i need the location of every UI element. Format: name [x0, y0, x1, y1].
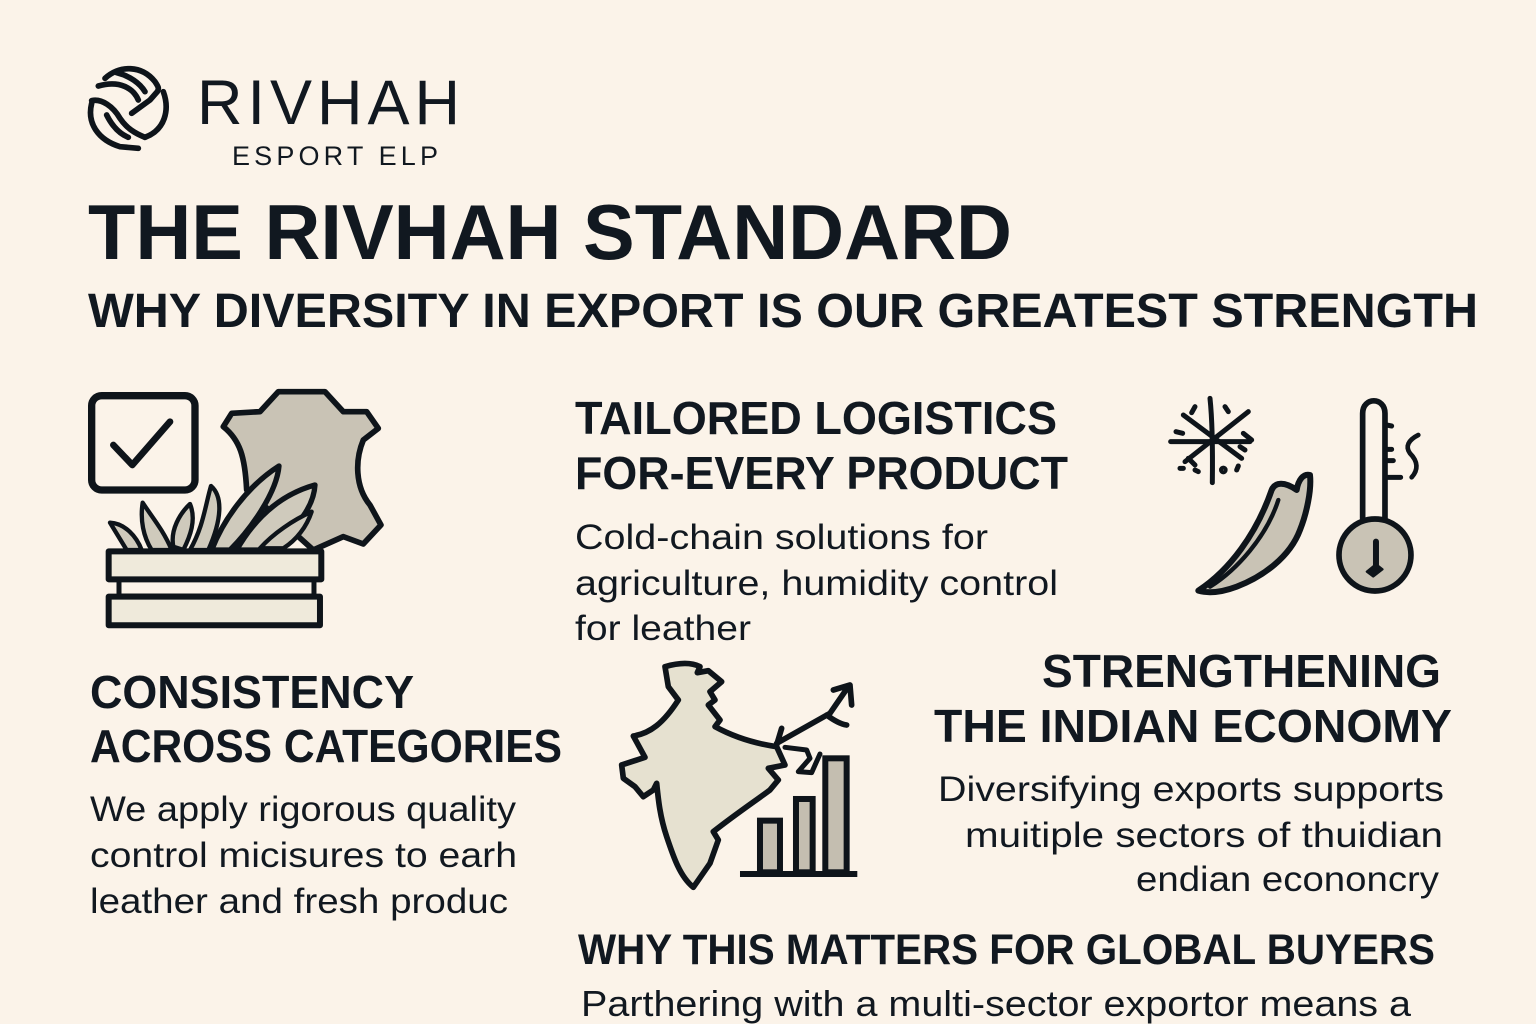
body text: agriculture, humidity control — [575, 564, 1058, 603]
icon: growth arrow — [777, 685, 852, 745]
body text: Cold-chain solutions for — [575, 518, 988, 557]
body text: for leather — [575, 609, 751, 648]
body text — [938, 770, 1444, 899]
icon: snowflake, chili and thermometer — [1171, 398, 1418, 592]
body text — [575, 518, 1058, 648]
body text: muitiple sectors of thuidian — [965, 816, 1443, 855]
body text: Parthering with a multi-sector exportor means a — [581, 983, 1412, 1024]
logo tagline: ESPORT ELP — [232, 141, 438, 171]
panel: strengthening the Indian economy — [934, 645, 1452, 899]
heading: TAILORED LOGISTICS — [575, 392, 1057, 444]
heading: THE INDIAN ECONOMY — [934, 700, 1452, 752]
heading: ACROSS CATEGORIES — [90, 720, 562, 772]
body text: Diversifying exports supports — [938, 770, 1444, 809]
heading — [575, 392, 1068, 499]
heading: FOR-EVERY PRODUCT — [575, 447, 1068, 499]
title: THE RIVHAH STANDARD — [88, 188, 1012, 276]
icon: quality check, leather hide and crate of produce — [92, 392, 381, 625]
icon: India map — [622, 664, 785, 887]
bar chart — [740, 758, 857, 874]
body text — [90, 790, 517, 921]
body text: endian econoncry — [1136, 860, 1440, 899]
body text: leather and fresh produc — [90, 882, 508, 921]
heading: CONSISTENCY — [90, 666, 414, 718]
logo — [91, 68, 460, 171]
logo wordmark: RIVHAH — [197, 68, 460, 138]
panel: consistency across categories — [90, 666, 562, 921]
panel: why this matters for global buyers — [578, 926, 1435, 1024]
icon: thermometer — [1339, 401, 1418, 591]
subtitle: WHY DIVERSITY IN EXPORT IS OUR GREATEST STRENGTH — [88, 285, 1478, 338]
heading: STRENGTHENING — [1042, 645, 1441, 697]
icon: logo mark — [91, 69, 166, 148]
heading — [934, 645, 1452, 752]
body text: We apply rigorous quality — [90, 790, 517, 829]
panel: tailored logistics — [575, 392, 1068, 648]
icon: snowflake — [1171, 398, 1252, 483]
heading — [90, 666, 562, 772]
icon: India map with growth chart — [622, 664, 857, 887]
body text: control micisures to earh — [90, 836, 517, 875]
heading: WHY THIS MATTERS FOR GLOBAL BUYERS — [578, 926, 1435, 974]
icon: chili — [1198, 475, 1310, 592]
